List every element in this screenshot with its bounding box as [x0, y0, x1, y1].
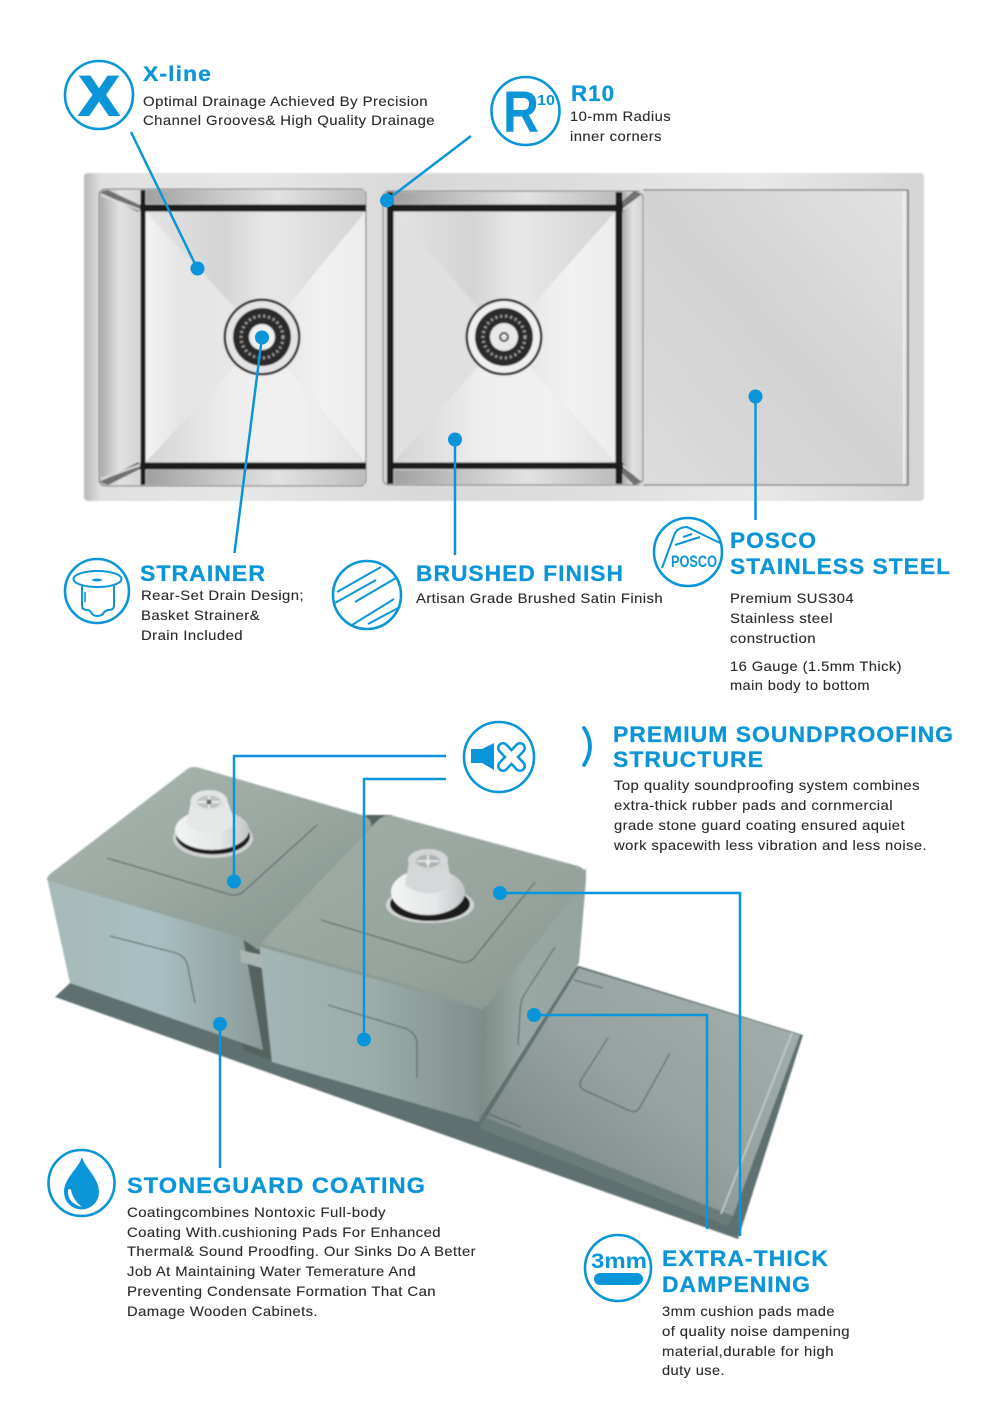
text: stoneguard description: Coatingcombines Nontoxic Full-body: [127, 1204, 386, 1220]
sink plate: [84, 173, 924, 501]
left bowl body: [47, 767, 371, 1050]
text: dampening description: material,durable for high: [662, 1343, 834, 1359]
heading: brushed finish: BRUSHED FINISH: [416, 561, 624, 586]
heading: X-line: X-line: [143, 63, 212, 86]
icon: brushed lines: [333, 561, 401, 629]
text: strainer description: Drain Included: [141, 627, 243, 643]
underside sink photo: [47, 767, 803, 1239]
text: dampening description: [662, 1303, 850, 1378]
text: POSCO description: main body to bottom: [730, 677, 870, 693]
right bowl: [383, 191, 643, 485]
flange and drainboard underside: [55, 966, 803, 1239]
feature: POSCO stainless steel: [654, 518, 951, 693]
decorative bracket: [584, 728, 590, 765]
icon: 3mm pad: 3mm: [591, 1250, 647, 1273]
left bowl: [99, 189, 366, 486]
stamped panel outlines: [107, 825, 670, 1127]
heading: stoneguard coating: STONEGUARD COATING: [127, 1173, 426, 1198]
text: stoneguard description: Preventing Condensate Formation That Can: [127, 1283, 436, 1299]
heading: extra-thick dampening: DAMPENING: [662, 1272, 811, 1297]
text: soundproofing description: grade stone guard coating ensured aquiet: [614, 817, 905, 833]
gap between bowls: [240, 815, 392, 1060]
text: dampening description: of quality noise dampening: [662, 1323, 850, 1339]
feature: strainer: [65, 559, 304, 643]
callout dots: [190, 194, 762, 1046]
heading: POSCO stainless steel: STAINLESS STEEL: [730, 554, 951, 579]
icon: POSCO: POSCO: [671, 552, 717, 571]
text: strainer description: Basket Strainer&: [141, 607, 260, 623]
icon: 3mm pad: [585, 1235, 651, 1301]
right bowl body: [259, 816, 586, 1122]
text: R10 description: [570, 108, 671, 144]
icon: muted speaker: [464, 722, 534, 792]
heading: premium soundproofing: [613, 722, 954, 772]
heading: premium soundproofing: STRUCTURE: [613, 747, 764, 772]
text: POSCO description: Stainless steel: [730, 610, 833, 626]
feature: brushed finish: [333, 561, 663, 629]
heading: extra-thick dampening: EXTRA-THICK: [662, 1246, 829, 1271]
right strainer plug: [386, 849, 474, 923]
left drain: [224, 298, 300, 376]
text: stoneguard description: Job At Maintaining Water Temerature And: [127, 1263, 416, 1279]
text: brushed finish description: Artisan Grade Brushed Satin Finish: [416, 590, 663, 606]
feature: premium soundproofing: [464, 722, 954, 853]
icon: X circle: [65, 61, 133, 129]
heading: POSCO stainless steel: [730, 528, 951, 579]
text: X-line description: Optimal Drainage Achieved By Precision: [143, 93, 428, 109]
text: POSCO description: construction: [730, 630, 816, 646]
text: stoneguard description: Thermal& Sound Proodfing. Our Sinks Do A Better: [127, 1243, 476, 1259]
text: strainer description: Rear-Set Drain Design;: [141, 587, 304, 603]
text: stoneguard description: [127, 1204, 476, 1319]
heading: R10: R10: [571, 81, 615, 106]
icon: POSCO: [654, 518, 722, 586]
text: soundproofing description: work spacewith less vibration and less noise.: [613, 837, 927, 853]
text: dampening description: 3mm cushion pads made: [662, 1303, 835, 1319]
text: soundproofing description: extra-thick rubber pads and cornmercial: [614, 797, 893, 813]
heading: POSCO stainless steel: POSCO: [730, 528, 817, 553]
feature: R10: [492, 77, 671, 145]
right drain: [466, 298, 542, 376]
icon: X circle: X: [79, 64, 119, 127]
icon: R10 circle: R: [503, 80, 539, 145]
text: POSCO description: Premium SUS304: [730, 590, 854, 606]
text: soundproofing description: [613, 777, 927, 853]
text: X-line description: Channel Grooves& High Quality Drainage: [143, 112, 435, 128]
text: POSCO description: 16 Gauge (1.5mm Thick): [730, 658, 902, 674]
feature: X-line: [65, 61, 435, 129]
drainboard: [643, 190, 908, 485]
icon: R10 circle: [492, 77, 560, 145]
icon: R10 circle: 10: [537, 92, 555, 109]
heading: premium soundproofing: PREMIUM SOUNDPROOFING: [613, 722, 954, 747]
text: strainer description: [141, 587, 304, 643]
text: stoneguard description: Damage Wooden Cabinets.: [127, 1303, 318, 1319]
text: POSCO description: [730, 590, 902, 693]
heading: strainer: STRAINER: [140, 561, 266, 586]
icon: water drop: [48, 1150, 114, 1216]
top-view stainless sink photo: [84, 173, 924, 501]
text: stoneguard description: Coating With.cushioning Pads For Enhanced: [127, 1224, 441, 1240]
feature: extra-thick dampening: [585, 1235, 850, 1378]
text: soundproofing description: Top quality soundproofing system combines: [614, 777, 920, 793]
icon: strainer: [65, 559, 129, 623]
text: R10 description: 10-mm Radius: [570, 108, 671, 124]
heading: extra-thick dampening: [662, 1246, 829, 1297]
text: X-line description: [143, 93, 435, 128]
left strainer plug: [173, 790, 253, 858]
feature: stoneguard coating: [48, 1150, 476, 1319]
callout connector lines: [131, 132, 756, 1236]
text: dampening description: duty use.: [662, 1362, 725, 1378]
text: R10 description: inner corners: [570, 128, 662, 144]
